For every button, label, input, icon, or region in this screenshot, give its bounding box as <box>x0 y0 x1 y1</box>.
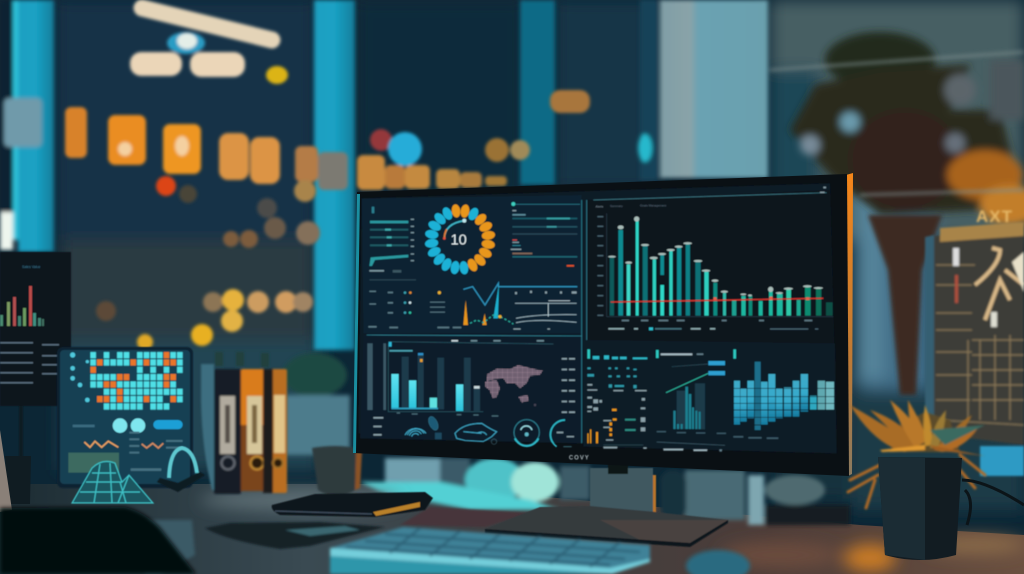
donut gauge with score 10: 10 <box>451 233 467 249</box>
small left mug <box>0 430 31 512</box>
lower-mid widgets <box>587 349 778 452</box>
dark foreground shape <box>0 507 196 574</box>
left monitor with bar chart <box>0 252 71 465</box>
right background monitor <box>925 207 1024 476</box>
world map <box>485 365 543 406</box>
top-right bar chart: Alerts <box>596 204 604 208</box>
hologram wire mesh <box>72 461 153 503</box>
tree trunk <box>868 215 942 395</box>
teal pillars <box>18 0 54 252</box>
top-right bar chart: Summary <box>610 204 623 208</box>
mouse <box>686 550 750 574</box>
window line <box>770 52 1024 195</box>
heat-map cells <box>90 352 183 410</box>
phone on desk <box>205 522 385 549</box>
tablet with heat-map grid <box>57 347 193 488</box>
keyboard slab <box>145 520 195 574</box>
plant leaves <box>848 400 985 508</box>
background plant <box>283 353 350 455</box>
behind-monitor glow <box>385 458 440 496</box>
tablet controls <box>113 418 127 433</box>
keyboard <box>330 527 650 574</box>
monitor stand <box>485 464 728 547</box>
legend dots <box>368 291 461 328</box>
coffee mug <box>312 446 362 496</box>
top-right bar chart <box>596 203 833 330</box>
screen background <box>358 183 837 453</box>
binders <box>201 352 287 494</box>
top-right text rows <box>511 202 580 267</box>
top-right bar chart: Goals Management <box>640 203 666 207</box>
main monitor <box>353 173 853 547</box>
lower-left bar chart <box>367 340 575 417</box>
lower-right stacked column heat chart <box>733 362 835 430</box>
left monitor with bar chart: Sales Value <box>22 265 40 269</box>
plant pot <box>878 457 962 560</box>
line chart with spikes <box>463 283 577 330</box>
left slider list <box>369 207 416 280</box>
city lights bokeh <box>65 8 590 350</box>
monitor brand: COVY <box>569 455 590 461</box>
arch headphone stand <box>157 448 205 492</box>
sign letters: AXT <box>976 207 1013 226</box>
bottom icons <box>373 415 574 447</box>
donut gauge with score 10 <box>424 204 496 275</box>
desk surface <box>0 458 1024 574</box>
potted plant <box>848 400 1024 560</box>
notebook <box>272 492 433 517</box>
